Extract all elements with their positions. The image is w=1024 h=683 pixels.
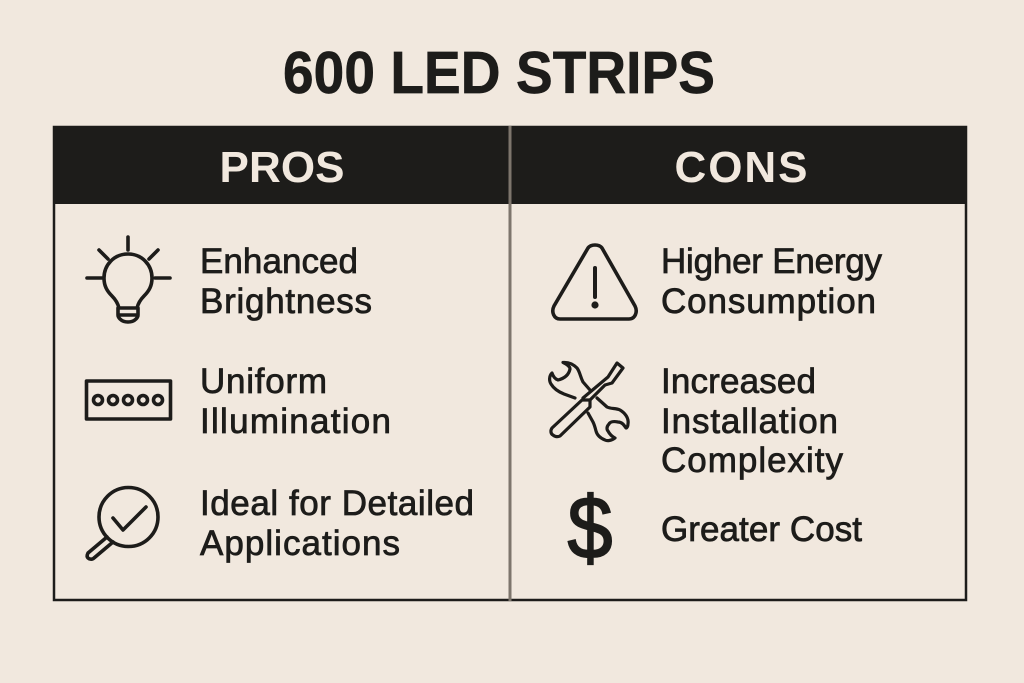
- text: increased installation complexity: Increased: [661, 362, 816, 401]
- heading: pros: PROS: [220, 143, 344, 192]
- panel: comparison table: [53, 126, 967, 601]
- text: ideal for detailed applications: Ideal for Detailed: [200, 484, 474, 523]
- text: enhanced brightness: Enhanced: [200, 242, 358, 281]
- text: greater cost: Greater Cost: [661, 510, 862, 549]
- text: higher energy consumption: [661, 242, 882, 321]
- icon: light bulb: [87, 237, 170, 322]
- text: ideal for detailed applications: [200, 484, 474, 563]
- text: ideal for detailed applications: Applications: [200, 524, 400, 563]
- icon: magnifier with check: [87, 488, 158, 559]
- text: higher energy consumption: Higher Energy: [661, 242, 882, 281]
- icon: dollar sign: $: [567, 478, 613, 577]
- text: increased installation complexity: Installation: [661, 402, 838, 441]
- icon: wrench and screwdriver: [550, 362, 628, 441]
- text: increased installation complexity: [661, 362, 844, 480]
- text: higher energy consumption: Consumption: [661, 282, 876, 321]
- text: uniform illumination: Illumination: [200, 402, 391, 441]
- icon: warning triangle: [553, 245, 636, 319]
- text: enhanced brightness: [200, 242, 372, 321]
- text: uniform illumination: [200, 362, 391, 441]
- text: increased installation complexity: Complexity: [661, 441, 844, 480]
- heading: cons: CONS: [674, 143, 808, 192]
- text: enhanced brightness: Brightness: [200, 282, 372, 321]
- icon: led strip: [86, 381, 170, 419]
- text: uniform illumination: Uniform: [200, 362, 327, 401]
- title: 600 LED STRIPS: [283, 40, 715, 106]
